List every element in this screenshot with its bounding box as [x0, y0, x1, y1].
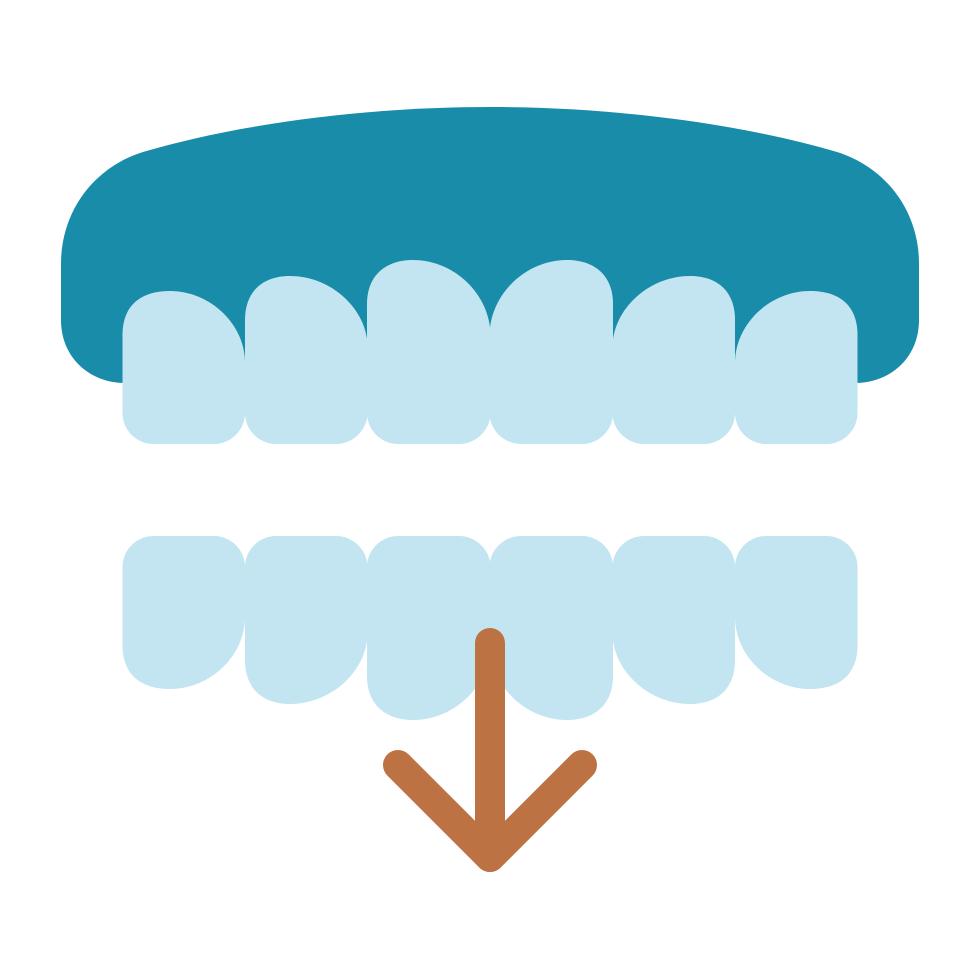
icon: lower teeth — [122, 536, 858, 720]
icon: upper teeth — [122, 260, 858, 444]
arrow: downward — [398, 643, 582, 857]
icon: upper gum — [61, 107, 919, 383]
